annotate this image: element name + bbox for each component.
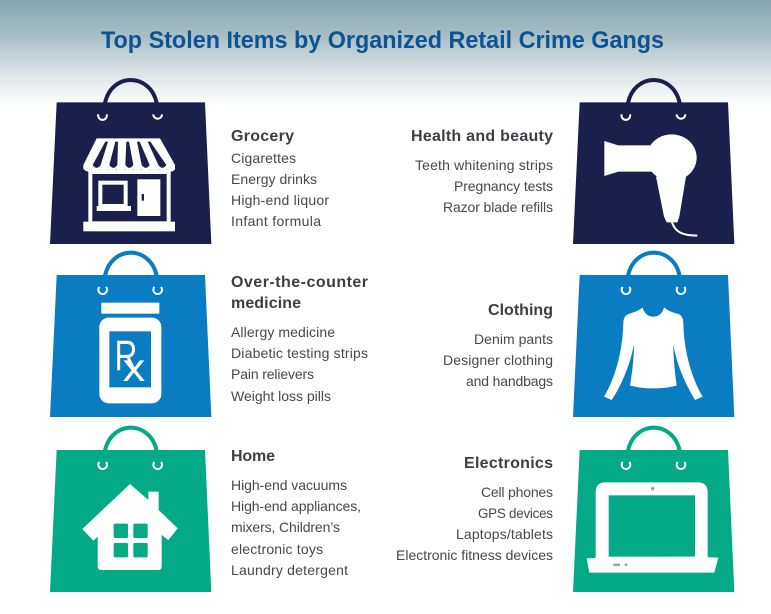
panel: health and beauty bag — [573, 80, 734, 244]
text block: home: Laundry detergent — [231, 562, 348, 578]
text block: over-the-counter medicine: Diabetic testing strips — [231, 345, 368, 361]
text block: over-the-counter medicine: Weight loss pills — [231, 388, 331, 404]
header gradient background — [0, 0, 771, 106]
icon: hair dryer — [604, 134, 697, 236]
text block: home — [231, 448, 361, 578]
text block: grocery — [231, 128, 329, 229]
icon: sweater — [604, 307, 703, 400]
title: Top Stolen Items by Organized Retail Crime Gangs — [101, 27, 664, 54]
text block: home: Home — [231, 448, 275, 465]
text block: grocery: Grocery — [231, 128, 294, 145]
text block: over-the-counter medicine: Pain relievers — [231, 366, 314, 382]
text block: clothing: Denim pants — [474, 331, 553, 347]
text block: electronics: Electronics — [464, 455, 553, 472]
icon: prescription bottle — [99, 303, 161, 403]
text block: grocery: High-end liquor — [231, 192, 329, 208]
text block: electronics: Electronic fitness devices — [396, 547, 553, 563]
icon: storefront — [83, 138, 175, 231]
icon: prescription bottle: x — [123, 346, 146, 390]
text block: clothing: Clothing — [488, 302, 553, 319]
text block: electronics: Cell phones — [481, 484, 553, 500]
text block: electronics: GPS devices — [478, 506, 553, 521]
text block: health and beauty: Health and beauty — [411, 128, 553, 145]
text block: health and beauty — [411, 128, 553, 215]
text block: electronics: Laptops/tablets — [456, 526, 553, 542]
text block: grocery: Cigarettes — [231, 150, 296, 166]
panel: home bag — [50, 428, 211, 592]
text block: home: mixers, Children’s — [231, 519, 340, 535]
text block: over-the-counter medicine — [231, 274, 368, 404]
text block: health and beauty: Pregnancy tests — [454, 178, 553, 194]
text block: home: High-end appliances, — [231, 498, 361, 514]
icon: house — [82, 484, 178, 570]
icon: prescription bottle: R — [115, 332, 137, 380]
panel: grocery bag — [50, 80, 211, 244]
text block: clothing — [443, 302, 553, 389]
panel: over-the-counter medicine bag — [50, 253, 211, 417]
text block: home: High-end vacuums — [231, 477, 347, 493]
panel: electronics bag — [573, 428, 734, 592]
text block: grocery: Infant formula — [231, 213, 321, 229]
text block: over-the-counter medicine: medicine — [231, 295, 301, 312]
text block: clothing: and handbags — [466, 373, 553, 389]
text block: electronics — [396, 455, 553, 563]
text block: health and beauty: Teeth whitening strips — [415, 157, 553, 173]
text block: grocery: Energy drinks — [231, 171, 317, 187]
text block: over-the-counter medicine: Allergy medicine — [231, 324, 335, 340]
text block: home: electronic toys — [231, 541, 323, 557]
panel: clothing bag — [573, 253, 734, 417]
text block: clothing: Designer clothing — [443, 352, 553, 368]
text block: over-the-counter medicine: Over-the-counter — [231, 274, 368, 291]
text block: health and beauty: Razor blade refills — [443, 199, 553, 215]
icon: laptop — [587, 482, 718, 573]
